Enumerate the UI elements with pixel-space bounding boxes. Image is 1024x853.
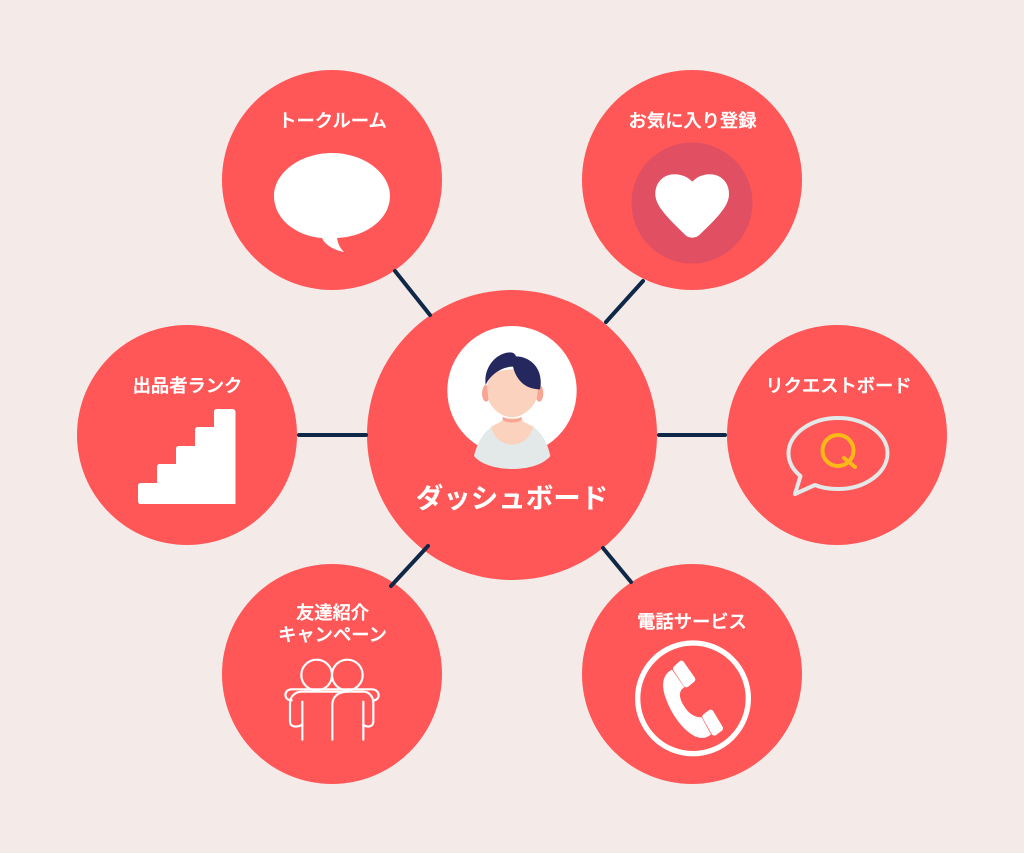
label: トークルーム [278,110,387,131]
label: 出品者ランク [133,375,242,396]
panel: phone service [582,564,802,784]
icon: phone [638,643,748,754]
panel: referral campaign [222,564,442,784]
label: 友達紹介 [296,602,369,623]
icon: heart [632,142,752,264]
label: リクエストボード [765,375,912,396]
label: dashboard: ダッシュボード [416,482,608,514]
label: 電話サービス [637,611,747,632]
panel: favorites [582,70,802,290]
label: お気に入り登録 [629,110,756,131]
connector lines [299,271,725,586]
panel: request board [727,325,947,545]
panel: talk room [222,70,442,290]
panel: center dashboard [367,290,657,580]
icon: stairs [138,409,236,504]
label: キャンペーン [278,624,387,645]
avatar [447,326,577,469]
panel: seller rank [77,325,297,545]
icon: question bubble [788,418,888,494]
icon: two people [285,660,379,740]
icon: speech bubble [274,153,390,252]
